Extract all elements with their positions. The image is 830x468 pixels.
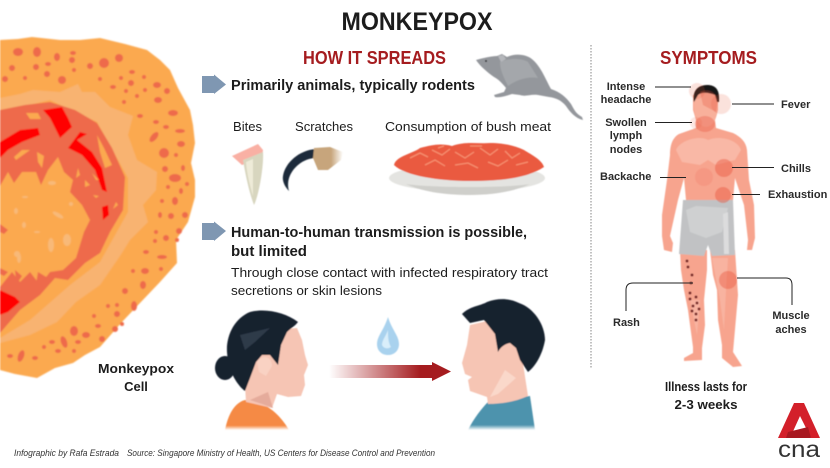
arrow: human-to-human bullet <box>202 222 226 241</box>
icon: woman profile <box>215 310 308 430</box>
divider: dotted column line <box>590 45 592 368</box>
label: swollen lymph nodes: nodes <box>610 144 642 156</box>
label: intense headache: Intense <box>607 81 645 93</box>
label: consumption of bush meat: Consumption of bush meat <box>385 120 552 134</box>
icon: man profile <box>462 299 545 430</box>
figure: human body with symptoms <box>662 83 755 367</box>
text: human-to-human heading: but limited <box>231 244 307 260</box>
label: backache: Backache <box>600 171 651 183</box>
red patches <box>0 107 109 315</box>
footnote: credits and source: Infographic by Rafa Estrada <box>14 448 119 458</box>
footnote: credits and source: Source: Singapore Ministry of Health, US Centers for Disease Control and Prevention <box>127 448 435 458</box>
label: chills: Chills <box>781 163 811 175</box>
icon: claw <box>283 147 343 191</box>
symptom labels <box>600 81 828 336</box>
label: swollen lymph nodes: lymph <box>610 130 642 142</box>
icon: water droplet <box>377 317 399 355</box>
logo: cna <box>778 403 820 462</box>
icon: plate of bush meat <box>389 143 545 195</box>
label: exhaustion: Exhaustion <box>768 189 828 201</box>
label: swollen lymph nodes: Swollen <box>605 117 647 129</box>
title: MONKEYPOX <box>342 8 493 36</box>
heading: symptoms: SYMPTOMS <box>660 48 757 68</box>
label: rash: Rash <box>613 317 640 329</box>
text: transmission description: secretions or skin lesions <box>231 283 383 298</box>
label: intense headache: headache <box>601 94 651 106</box>
shorts <box>679 200 735 256</box>
icon: tooth <box>232 144 263 205</box>
ring flecks <box>14 113 118 209</box>
label: muscle aches: aches <box>775 324 807 336</box>
icon: rat <box>476 54 583 120</box>
symptom pain circles <box>689 83 737 289</box>
arrow: primarily animals bullet <box>202 74 226 94</box>
text: primarily animals: Primarily animals, typically rodents <box>231 78 475 94</box>
label: bites: Bites <box>233 120 262 134</box>
text: illness duration: Illness lasts for <box>665 379 747 394</box>
heading: how it spreads: HOW IT SPREADS <box>303 48 446 68</box>
rash dots <box>686 260 700 322</box>
text: human-to-human heading: Human-to-human transmission is possible, <box>231 225 527 241</box>
cell granules <box>0 47 189 363</box>
label: muscle aches: Muscle <box>772 310 810 322</box>
label: fever: Fever <box>781 99 811 111</box>
monkeypox cell illustration <box>0 37 195 378</box>
arrow: transmission <box>329 362 451 381</box>
text: illness duration: 2-3 weeks <box>674 397 738 412</box>
symptom leader lines <box>626 87 792 311</box>
label: monkeypox cell: Monkeypox <box>98 361 175 376</box>
label: scratches: Scratches <box>295 120 353 134</box>
label: monkeypox cell: Cell <box>124 379 148 394</box>
text: transmission description: Through close contact with infected respiratory tract <box>231 265 548 280</box>
logo: cna: cna <box>778 436 820 462</box>
